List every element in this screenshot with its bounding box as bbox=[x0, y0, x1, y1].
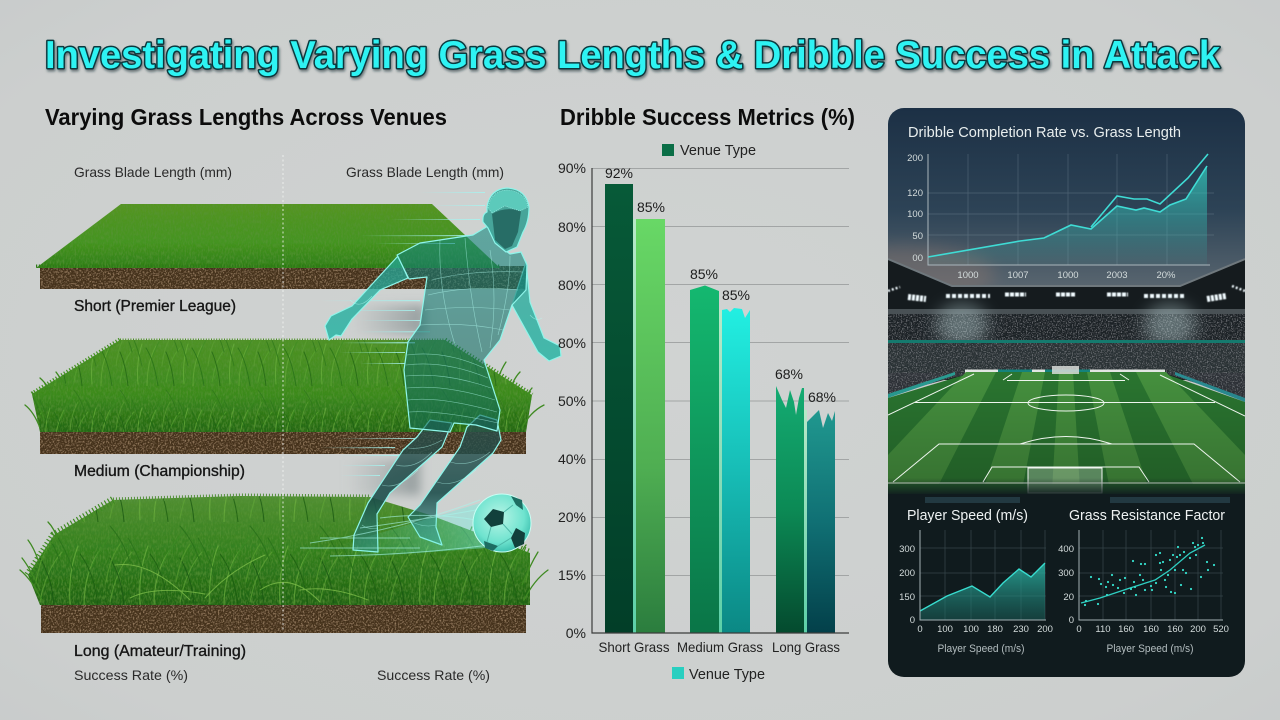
wireframe mesh bbox=[350, 238, 542, 529]
near goal bbox=[1028, 468, 1102, 493]
bar chart: 15% bbox=[558, 567, 586, 583]
panel: stadium analytics bbox=[888, 108, 1245, 677]
sky bbox=[888, 108, 1245, 293]
panel: grass lengths bbox=[20, 104, 561, 683]
bar chart: 80% bbox=[558, 277, 586, 293]
football pitch bbox=[888, 366, 1245, 500]
medium grass bars bbox=[690, 286, 750, 633]
player speed chart: 0 bbox=[910, 615, 915, 626]
category labels: Long Grass bbox=[772, 639, 840, 655]
top line chart: 1000 bbox=[1057, 270, 1079, 281]
player speed chart: 0 bbox=[917, 624, 923, 635]
value labels: 68% bbox=[775, 366, 803, 382]
value labels: 85% bbox=[722, 287, 750, 303]
top line chart: 2003 bbox=[1106, 270, 1128, 281]
grass resistance scatter chart: 0 bbox=[1069, 615, 1074, 626]
grass resistance scatter chart: 400 bbox=[1058, 544, 1074, 555]
bar chart: 90% bbox=[558, 160, 586, 176]
stadium scene bbox=[888, 259, 1245, 402]
short grass slab bbox=[36, 204, 526, 289]
top line chart: 200 bbox=[907, 153, 923, 164]
grass resistance scatter chart bbox=[1058, 508, 1229, 655]
long grass slab bbox=[20, 496, 548, 633]
grass resistance scatter chart: 110 bbox=[1095, 624, 1111, 635]
medium grass slab bbox=[25, 340, 544, 454]
value labels bbox=[605, 165, 836, 405]
ball trail bbox=[300, 500, 490, 558]
top line chart: 50 bbox=[912, 231, 923, 242]
medium label: Medium (Championship) bbox=[74, 463, 245, 480]
left arm bbox=[325, 256, 408, 340]
player speed chart: 180 bbox=[987, 624, 1003, 635]
head bbox=[483, 188, 529, 252]
axis label: left grass blade length: Grass Blade Length (mm) bbox=[74, 164, 232, 180]
grass resistance scatter chart: 160 bbox=[1143, 624, 1159, 635]
top chart title: Dribble Completion Rate vs. Grass Length bbox=[908, 125, 1181, 141]
value labels: 85% bbox=[690, 266, 718, 282]
dark lower section bbox=[888, 478, 1245, 677]
player speed chart: 150 bbox=[899, 592, 915, 603]
grass resistance scatter chart: 200 bbox=[1190, 624, 1206, 635]
player speed chart: 230 bbox=[1013, 624, 1029, 635]
grass resistance scatter chart: 160 bbox=[1167, 624, 1183, 635]
player speed chart: 200 bbox=[1037, 624, 1053, 635]
soccer ball bbox=[473, 494, 531, 552]
right success rate label: Success Rate (%) bbox=[377, 667, 490, 683]
right arm bbox=[512, 262, 561, 361]
bar chart: 20% bbox=[558, 509, 586, 525]
grass resistance scatter chart: 20 bbox=[1063, 592, 1074, 603]
player speed chart: 300 bbox=[899, 544, 915, 555]
top line chart bbox=[907, 125, 1214, 281]
bar chart: 0% bbox=[566, 625, 586, 641]
legs bbox=[353, 420, 452, 552]
top line chart: 120 bbox=[907, 188, 923, 199]
top line chart: 100 bbox=[907, 209, 923, 220]
axis label: right grass blade length: Grass Blade Length (mm) bbox=[346, 164, 504, 180]
grass resistance scatter chart: 300 bbox=[1058, 568, 1074, 579]
panel: dribble success metrics bbox=[558, 104, 855, 683]
heading: dribble metrics: Dribble Success Metrics (%) bbox=[560, 104, 855, 130]
player speed chart: 100 bbox=[963, 624, 979, 635]
long grass bars bbox=[776, 386, 835, 633]
bar chart: 40% bbox=[558, 451, 586, 467]
top line chart: 1007 bbox=[1007, 270, 1029, 281]
bar chart: 80% bbox=[558, 219, 586, 235]
player hologram bbox=[325, 188, 561, 552]
category labels bbox=[598, 639, 840, 655]
player speed title: Player Speed (m/s) bbox=[907, 508, 1028, 524]
player speed chart bbox=[899, 508, 1053, 655]
grass resistance scatter chart: 0 bbox=[1076, 624, 1082, 635]
bar chart bbox=[558, 160, 849, 655]
far goal bbox=[1052, 366, 1079, 374]
category labels: Short Grass bbox=[598, 639, 670, 655]
value labels: 85% bbox=[637, 199, 665, 215]
player speed axis title: Player Speed (m/s) bbox=[938, 643, 1024, 655]
category labels: Medium Grass bbox=[677, 639, 763, 655]
short grass bars bbox=[605, 184, 665, 633]
scatter axis title: Player Speed (m/s) bbox=[1106, 643, 1194, 655]
heading: grass lengths: Varying Grass Lengths Across Venues bbox=[45, 104, 447, 130]
player speed chart: 200 bbox=[899, 568, 915, 579]
bar chart: 80% bbox=[558, 335, 586, 351]
grass resistance scatter chart: 160 bbox=[1118, 624, 1134, 635]
motion trails behind player bbox=[320, 192, 485, 495]
long label: Long (Amateur/Training) bbox=[74, 643, 246, 660]
top line chart: 00 bbox=[912, 253, 923, 264]
short label: Short (Premier League) bbox=[74, 298, 236, 315]
top line chart: 20% bbox=[1156, 270, 1176, 281]
top legend: Venue Type bbox=[680, 143, 756, 159]
title: Investigating Varying Grass Lengths & Dribble Success in Attack bbox=[45, 34, 1220, 77]
top line chart: 1000 bbox=[957, 270, 979, 281]
torso and shorts bbox=[397, 226, 527, 432]
value labels: 92% bbox=[605, 165, 633, 181]
grass resistance title: Grass Resistance Factor bbox=[1069, 508, 1225, 524]
bar chart: 50% bbox=[558, 393, 586, 409]
grass resistance scatter chart: 520 bbox=[1213, 624, 1229, 635]
player speed chart: 100 bbox=[937, 624, 953, 635]
bottom legend: Venue Type bbox=[689, 667, 765, 683]
value labels: 68% bbox=[808, 389, 836, 405]
left success rate label: Success Rate (%) bbox=[74, 667, 188, 683]
